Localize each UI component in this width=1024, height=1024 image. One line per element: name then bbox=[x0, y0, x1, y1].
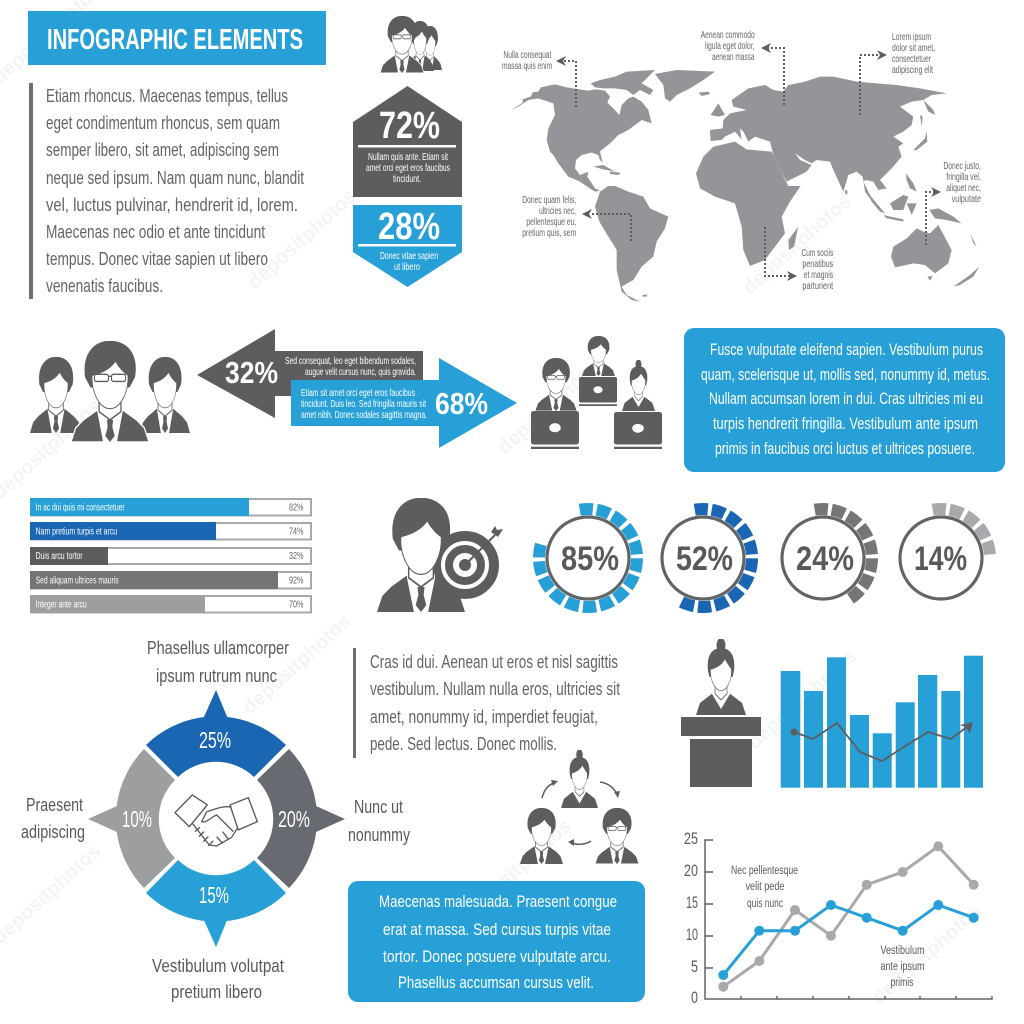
bar 70 percent: Integer ante arcu bbox=[36, 600, 87, 610]
bar 92 percent: 92% bbox=[289, 576, 304, 586]
americas and greenland bbox=[511, 70, 715, 302]
callout: Donec justo: vulputate bbox=[952, 194, 981, 205]
donut 24 percent: 24% bbox=[796, 540, 854, 578]
watermark text: depositphotos bbox=[744, 645, 861, 754]
segment 15 percent bbox=[146, 860, 286, 947]
blue series bbox=[718, 900, 979, 980]
callout: Cum sociis: penatibus bbox=[802, 259, 833, 270]
info box bottom: erat at massa. Sed cursus turpis vitae bbox=[383, 920, 611, 939]
bar 74 percent: Nam pretium turpis et arcu bbox=[36, 526, 117, 538]
label: Praesent: adipiscing bbox=[21, 822, 85, 842]
callout: Lorem ipsum bbox=[860, 32, 935, 115]
label: Phasellus: Phasellus ullamcorper bbox=[147, 638, 289, 658]
intro paragraph: tempus. Donec vitae sapien ut libero bbox=[46, 249, 268, 269]
bar 82 percent: 82% bbox=[289, 502, 304, 514]
axis labels: 20 bbox=[684, 861, 698, 880]
callout: Aenean commodo: Aenean commodo bbox=[701, 30, 755, 41]
callout: Nulla consequat: Nulla consequat bbox=[503, 50, 552, 61]
stat hexagon 72 percent: tincidunt. bbox=[393, 174, 421, 185]
callout: Donec quam felis: ultricies nec, bbox=[539, 206, 576, 217]
annotation gray: quis nunc bbox=[747, 898, 783, 910]
arrow: 68 percent: amet nibh. Donec sodales sagittis magna. bbox=[301, 410, 427, 421]
stat hexagon 72 percent bbox=[353, 86, 462, 197]
trend line bbox=[790, 722, 973, 761]
arrow: 32 percent bbox=[197, 329, 423, 418]
axis labels: 10 bbox=[686, 925, 698, 944]
annotation gray bbox=[731, 865, 798, 910]
bar 70 percent: 70% bbox=[289, 600, 304, 610]
callout: Lorem ipsum: dolor sit amet, bbox=[892, 43, 935, 54]
intro paragraph: Etiam rhoncus. Maecenas tempus, tellus bbox=[46, 86, 288, 106]
info box top bbox=[684, 328, 1005, 472]
callout: Cum sociis: parturient bbox=[802, 281, 833, 292]
arrow: 68 percent: 68% bbox=[435, 386, 488, 421]
world map bbox=[511, 70, 979, 302]
eurasia, africa and oceania bbox=[696, 77, 979, 287]
intro paragraph: semper libero, sit amet, adipiscing sem bbox=[46, 140, 279, 160]
watermark text: depositphotos bbox=[459, 815, 576, 924]
callout: Cum sociis: et magnis bbox=[804, 270, 833, 281]
callout: Donec justo: fringilla vel, bbox=[946, 172, 981, 183]
stat hexagon 72 percent: 72% bbox=[379, 105, 440, 147]
label: Praesent bbox=[21, 795, 85, 842]
donut 85 percent bbox=[531, 501, 645, 615]
intro paragraph: Maecenas nec odio et ante tincidunt bbox=[46, 222, 265, 242]
bar 70 percent bbox=[30, 595, 311, 613]
callout: Donec justo: aliquet nec, bbox=[946, 183, 981, 194]
icon: business team bbox=[30, 341, 190, 442]
segment 10 percent bbox=[88, 749, 175, 888]
arrow: 32 percent: Sed consequat, leo eget bibendum sodales, bbox=[285, 356, 416, 367]
label: Nunc ut bbox=[348, 797, 410, 845]
annotation blue: ante ipsum bbox=[880, 961, 924, 973]
callout: Lorem ipsum: adipiscing elit bbox=[892, 65, 933, 76]
stat hexagon 72 percent: Nullam quis ante. Etiam sit bbox=[368, 152, 448, 163]
callout: Nulla consequat bbox=[502, 50, 576, 107]
info box bottom: Phasellus accumsan cursus velit. bbox=[398, 973, 594, 992]
callout: Lorem ipsum: Lorem ipsum bbox=[892, 32, 931, 43]
watermark text: depositphotos bbox=[494, 350, 611, 459]
middle paragraph bbox=[353, 648, 620, 758]
bar 92 percent bbox=[30, 571, 311, 589]
gray series bbox=[718, 841, 979, 992]
info box bottom: Maecenas malesuada. Praesent congue bbox=[379, 892, 617, 911]
bar 82 percent: In ac dui quis mi consectetuer bbox=[36, 502, 125, 514]
bar 32 percent: Duis arcu tortor bbox=[36, 551, 83, 562]
intro paragraph: neque sed ipsum. Nam quam nunc, blandit bbox=[46, 168, 304, 188]
arrow: 68 percent bbox=[291, 358, 517, 448]
icon: handshake bbox=[175, 795, 257, 846]
bar 74 percent bbox=[30, 522, 311, 540]
callout: Aenean commodo: aenean massa bbox=[712, 52, 755, 63]
arrow: 68 percent: tincidunt. Duis leo. Sed fringilla mauris sit bbox=[301, 399, 426, 410]
segment 10 percent: 10% bbox=[122, 806, 152, 832]
axis labels: 5 bbox=[691, 957, 698, 976]
horizontal bar list bbox=[30, 498, 311, 613]
axis labels: 25 bbox=[684, 829, 698, 848]
donut 52 percent bbox=[646, 501, 760, 615]
watermark text: depositphotos bbox=[244, 185, 361, 294]
info box bottom: tortor. Donec posuere vulputate arcu. bbox=[383, 947, 611, 966]
callout: Donec quam felis bbox=[522, 195, 631, 241]
callout: Aenean commodo bbox=[701, 30, 784, 105]
stat hexagon 28 percent bbox=[353, 205, 462, 287]
intro paragraph bbox=[29, 83, 304, 299]
stat hexagon 28 percent: Donec vitae sapien bbox=[380, 251, 438, 262]
stat hexagon 28 percent: 28% bbox=[378, 206, 440, 248]
label: Nunc ut: Nunc ut bbox=[354, 797, 403, 817]
axis labels bbox=[684, 829, 698, 1007]
bar 74 percent: 74% bbox=[289, 526, 304, 538]
middle paragraph: Cras id dui. Aenean ut eros et nisl sagittis bbox=[370, 652, 618, 672]
segment 15 percent: 15% bbox=[199, 882, 229, 908]
segment 25 percent bbox=[146, 690, 286, 777]
callout: Aenean commodo: ligula eget dolor, bbox=[705, 41, 754, 52]
bar 32 percent bbox=[30, 547, 311, 565]
segment 20 percent bbox=[257, 749, 345, 888]
donut 14 percent bbox=[884, 501, 998, 615]
label: Vestibulum volutpat: pretium libero bbox=[171, 982, 262, 1002]
label: Praesent: Praesent bbox=[26, 795, 83, 815]
stat hexagon 72 percent: amet orci eget eros faucibus bbox=[366, 163, 450, 174]
watermark text: depositphotos bbox=[239, 610, 356, 719]
donut 52 percent: 52% bbox=[676, 540, 733, 578]
title banner bbox=[28, 11, 326, 65]
bar chart with trend bbox=[781, 656, 983, 788]
axis labels: 0 bbox=[691, 988, 698, 1007]
watermark text: depositphotos bbox=[739, 190, 856, 299]
arrow: 32 percent: augue velit cursus nunc, quis gravida. bbox=[305, 367, 416, 378]
line chart bbox=[684, 829, 992, 1007]
intro paragraph: eget condimentum rhoncus, sem quam bbox=[46, 113, 280, 133]
callout: Donec justo: Donec justo, bbox=[943, 161, 981, 172]
arrow: 68 percent: Etiam sit amet orci eget eros faucibus bbox=[301, 388, 415, 399]
donut 14 percent: 14% bbox=[914, 540, 967, 578]
intro paragraph: venenatis faucibus. bbox=[46, 276, 163, 296]
annotation blue: primis bbox=[890, 977, 914, 989]
callout: Donec justo bbox=[926, 161, 981, 245]
info box bottom bbox=[348, 881, 645, 1002]
bar 82 percent bbox=[30, 498, 311, 516]
stat hexagon 28 percent: ut libero bbox=[394, 262, 420, 273]
bar 92 percent: Sed aliquam ultrices mauris bbox=[36, 576, 119, 586]
bar 32 percent: 32% bbox=[289, 551, 304, 562]
icon: man with target bbox=[377, 498, 503, 612]
label: Vestibulum volutpat: Vestibulum volutpat bbox=[152, 956, 284, 976]
icon: three business people small bbox=[380, 16, 442, 73]
segment 25 percent: 25% bbox=[199, 727, 231, 753]
watermark text: depositphotos bbox=[869, 900, 986, 1009]
donut 24 percent bbox=[766, 501, 880, 615]
annotation gray: Nec pellentesque bbox=[731, 865, 798, 877]
title banner: INFOGRAPHIC ELEMENTS bbox=[47, 24, 303, 56]
annotation gray: velit pede bbox=[746, 881, 784, 893]
donut 85 percent: 85% bbox=[561, 540, 619, 578]
icon: team cycle bbox=[520, 749, 639, 864]
label: Phasellus bbox=[147, 638, 289, 686]
middle paragraph: pede. Sed lectus. Donec mollis. bbox=[370, 734, 557, 754]
callout: Lorem ipsum: consectetuer bbox=[892, 54, 931, 65]
callout: Nulla consequat: massa quis enim bbox=[502, 61, 552, 72]
intro paragraph: vel, luctus pulvinar, hendrerit id, lorem. bbox=[46, 195, 298, 215]
segment 20 percent: 20% bbox=[278, 806, 310, 832]
icon: team with laptops bbox=[531, 336, 662, 449]
callout: Donec quam felis: pretium quis, sem bbox=[522, 228, 576, 239]
axes bbox=[705, 840, 992, 999]
callout: Cum sociis: Cum sociis bbox=[802, 248, 833, 259]
annotation blue: Vestibulum bbox=[880, 945, 924, 957]
label: Phasellus: ipsum rutrum nunc bbox=[156, 666, 277, 686]
callout: Cum sociis bbox=[765, 227, 833, 292]
callout: Donec quam felis: Donec quam felis, bbox=[522, 195, 576, 206]
middle paragraph: vestibulum. Nullam nulla eros, ultricies sit bbox=[370, 679, 620, 699]
label: Vestibulum volutpat bbox=[152, 956, 284, 1002]
callout: Donec quam felis: pellentesque eu, bbox=[526, 217, 576, 228]
annotation blue bbox=[880, 945, 924, 989]
label: Nunc ut: nonummy bbox=[348, 825, 410, 845]
arrow: 32 percent: 32% bbox=[225, 355, 278, 390]
axis labels: 15 bbox=[686, 893, 698, 912]
compass diagram bbox=[88, 690, 345, 947]
middle paragraph: amet, nonummy id, imperdiet feugiat, bbox=[370, 707, 598, 727]
icon: presenter at podium bbox=[681, 638, 761, 787]
